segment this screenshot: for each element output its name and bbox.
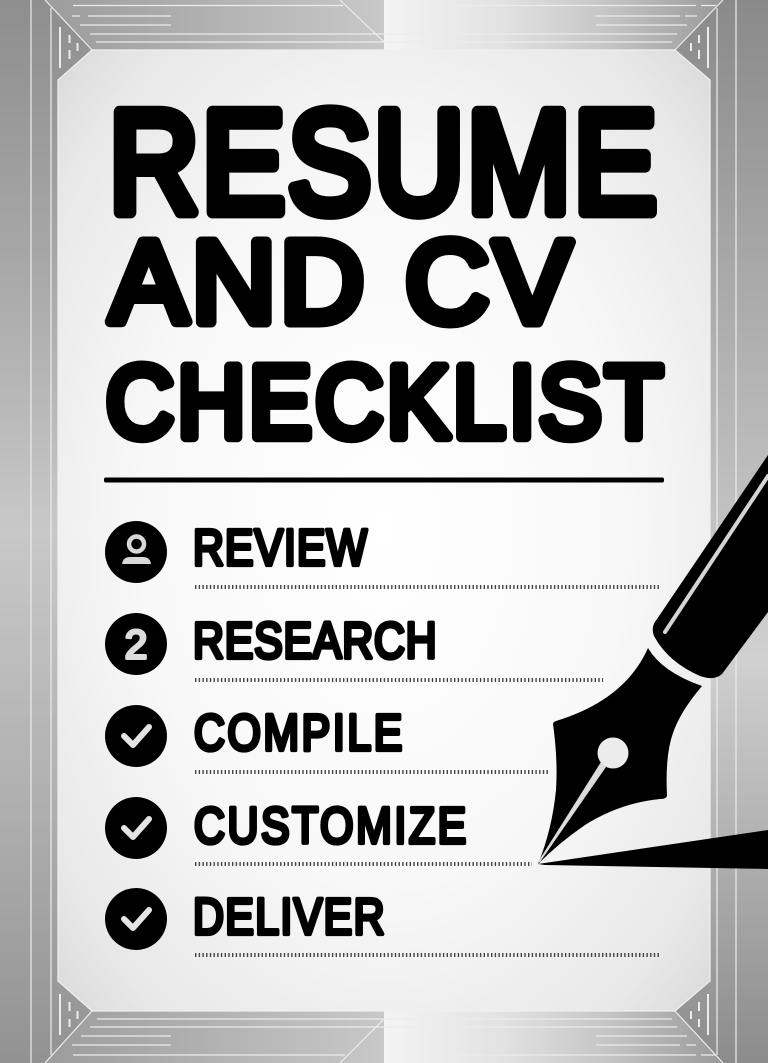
item 3: compile bbox=[105, 703, 550, 772]
title: CHECKLIST bbox=[106, 344, 663, 459]
item 5: deliver: DELIVER bbox=[193, 887, 385, 945]
ink stroke bbox=[538, 830, 768, 869]
icon: person bbox=[105, 521, 167, 583]
item 1: review bbox=[105, 518, 660, 587]
icon: fountain pen bbox=[538, 455, 768, 869]
divider rule bbox=[104, 478, 664, 482]
icon: number 2: 2 bbox=[125, 622, 147, 668]
paper sheet bbox=[58, 50, 710, 1011]
barrel highlight bbox=[665, 476, 768, 632]
item 2: research bbox=[105, 611, 603, 680]
icon: check bbox=[105, 705, 167, 767]
item 4: customize: CUSTOMIZE bbox=[194, 796, 466, 854]
item 3: compile: COMPILE bbox=[194, 703, 402, 761]
title: RESUME bbox=[109, 81, 657, 243]
icon: number 2 bbox=[105, 613, 167, 675]
icon: check bbox=[105, 797, 167, 859]
pen barrel bbox=[653, 455, 768, 678]
title bbox=[106, 81, 663, 459]
checklist bbox=[105, 518, 660, 955]
pen nib bbox=[538, 648, 702, 864]
title: AND CV bbox=[110, 217, 571, 347]
item 1: review: REVIEW bbox=[193, 518, 367, 576]
icon: check bbox=[105, 888, 167, 950]
item 5: deliver bbox=[105, 887, 660, 955]
item 4: customize bbox=[105, 796, 532, 864]
item 2: research: RESEARCH bbox=[193, 611, 437, 669]
nib slit and breather hole bbox=[538, 738, 628, 862]
